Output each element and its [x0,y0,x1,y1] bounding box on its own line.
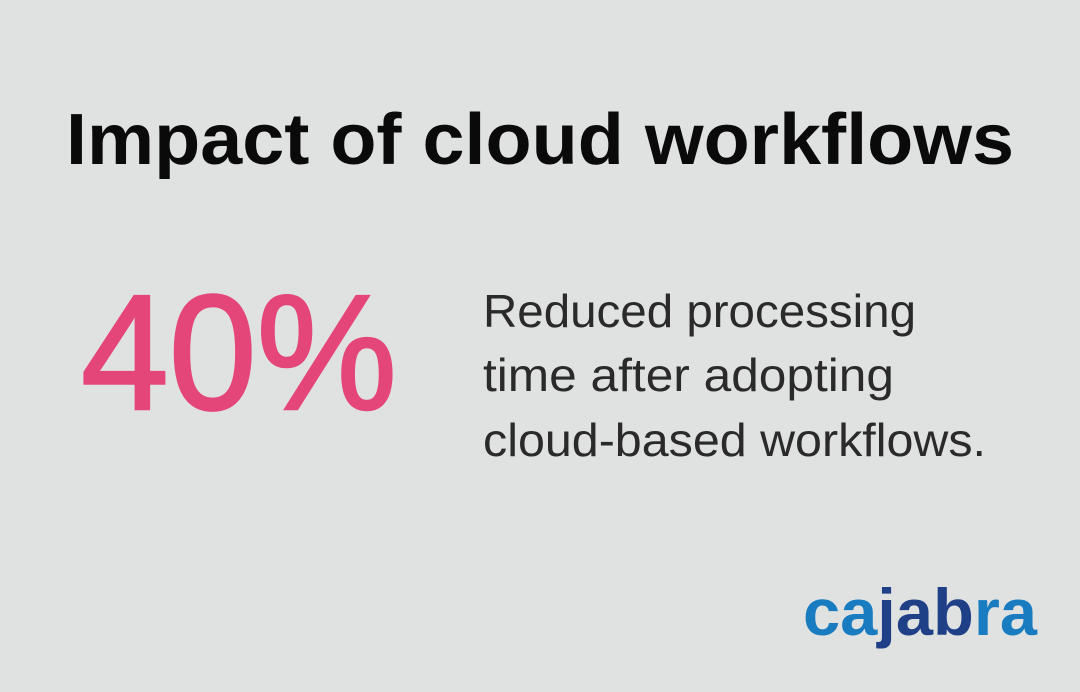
description text: Reduced processing [483,285,916,337]
logo: cajabra: cajabra [803,575,1038,649]
description text [483,285,986,466]
big stat: 40%: 40% [81,261,397,444]
title: Impact of cloud workflows [66,100,1014,180]
description text: time after adopting [483,349,894,401]
description text: cloud-based workflows. [483,414,986,466]
